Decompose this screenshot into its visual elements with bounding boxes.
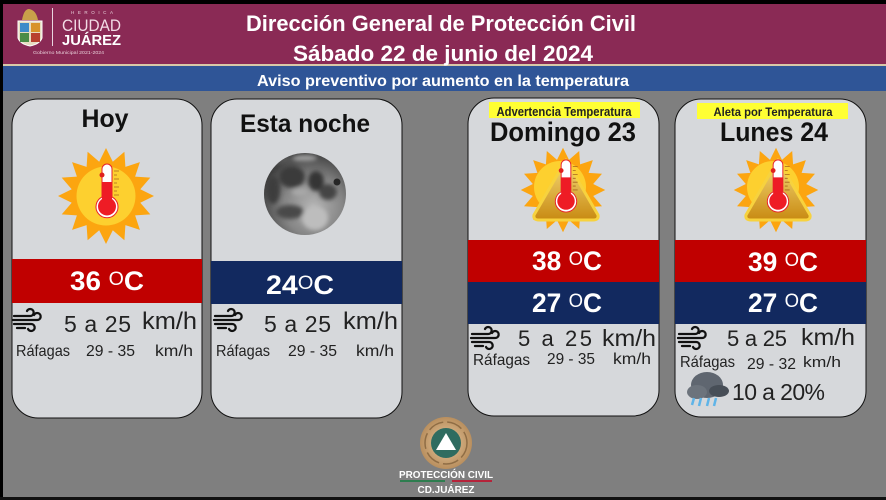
title [246, 11, 636, 66]
subtitle band [3, 66, 886, 91]
temperature bands: 39 [748, 247, 778, 277]
wind: 29 - 35 [547, 351, 595, 368]
temperature band: C [313, 270, 334, 300]
temperature band: C [124, 266, 144, 296]
panel: Lunes 24 [675, 99, 866, 417]
heading: Domingo 23: Domingo 23 [490, 117, 636, 147]
wind: 29 - 35 [288, 343, 337, 360]
icon: storm cloud [687, 372, 729, 406]
wind [678, 324, 855, 373]
wind [471, 325, 656, 369]
heading: Hoy: Hoy [82, 105, 129, 133]
icon: warning sun thermometer [521, 148, 605, 232]
wind [13, 308, 197, 360]
logo: Ciudad Juárez [18, 8, 121, 55]
logo: Ciudad Juárez: JUÁREZ [62, 32, 121, 49]
heading: Lunes 24: Lunes 24 [720, 117, 828, 147]
wind [214, 308, 398, 360]
heading: Esta noche: Esta noche [240, 110, 370, 138]
wind: Ráfagas [473, 352, 530, 369]
wind: 5 a 25 [518, 326, 592, 351]
wind: Ráfagas [216, 343, 270, 360]
temperature band: O [298, 273, 313, 294]
wind: km/h [803, 354, 841, 371]
temperature bands: O [569, 249, 583, 270]
temperature bands [468, 240, 659, 324]
temperature band: O [109, 269, 124, 290]
panel: Domingo 23 [468, 98, 659, 416]
wind: km/h [801, 324, 855, 350]
temperature bands: C [583, 288, 602, 318]
temperature bands: C [799, 247, 818, 277]
panel: Esta noche [211, 99, 402, 418]
wind: km/h [613, 351, 651, 368]
wind: Ráfagas [680, 354, 735, 371]
logo: Ciudad Juárez: CIUDAD [62, 16, 121, 35]
temperature band [211, 261, 402, 304]
temperature bands [675, 240, 866, 324]
temperature bands: O [785, 291, 799, 312]
wind: 5 a 25 [727, 326, 787, 351]
wind: 5 a 25 [264, 311, 331, 337]
panel: Hoy [12, 99, 202, 418]
subtitle band: Aviso preventivo por aumento en la temperatura [257, 73, 629, 90]
logo: Protección Civil [399, 417, 494, 496]
wind: 29 - 32 [747, 356, 796, 373]
title: Dirección General de Protección Civil [246, 11, 636, 36]
title: Sábado 22 de junio del 2024 [293, 41, 594, 66]
temperature bands: C [583, 246, 602, 276]
label: Aleta por Temperatura: Aleta por Temperatura [714, 105, 833, 119]
wind: Ráfagas [16, 343, 70, 360]
wind: km/h [602, 325, 656, 351]
icon: warning sun thermometer [734, 148, 818, 232]
header band [0, 0, 886, 66]
logo: Ciudad Juárez: HEROICA [71, 10, 113, 15]
temperature bands: 27 [532, 288, 562, 318]
wind: km/h [155, 343, 193, 360]
wind: km/h [343, 308, 398, 335]
temperature band: 36 [70, 266, 100, 296]
temperature bands: O [785, 250, 799, 271]
wind: 29 - 35 [86, 343, 135, 360]
temperature band [12, 259, 202, 303]
temperature bands: 27 [748, 288, 778, 318]
wind: km/h [142, 308, 197, 335]
temperature bands: O [569, 291, 583, 312]
wind: 5 a 25 [64, 311, 131, 337]
logo: Protección Civil: CD.JUÁREZ [418, 483, 475, 496]
temperature band: 24 [266, 270, 296, 300]
rain probability: 10 a 20% [732, 379, 825, 405]
icon: moon [262, 153, 346, 235]
icon: sun with thermometer [58, 148, 154, 244]
logo: Protección Civil: PROTECCIÓN CIVIL [399, 468, 494, 481]
temperature bands: 38 [532, 246, 562, 276]
logo: Ciudad Juárez: Gobierno Municipal 2021-2024 [33, 50, 105, 55]
temperature bands: C [799, 288, 818, 318]
label: Advertencia Temperatura: Advertencia Temperatura [496, 104, 632, 119]
wind: km/h [356, 343, 394, 360]
